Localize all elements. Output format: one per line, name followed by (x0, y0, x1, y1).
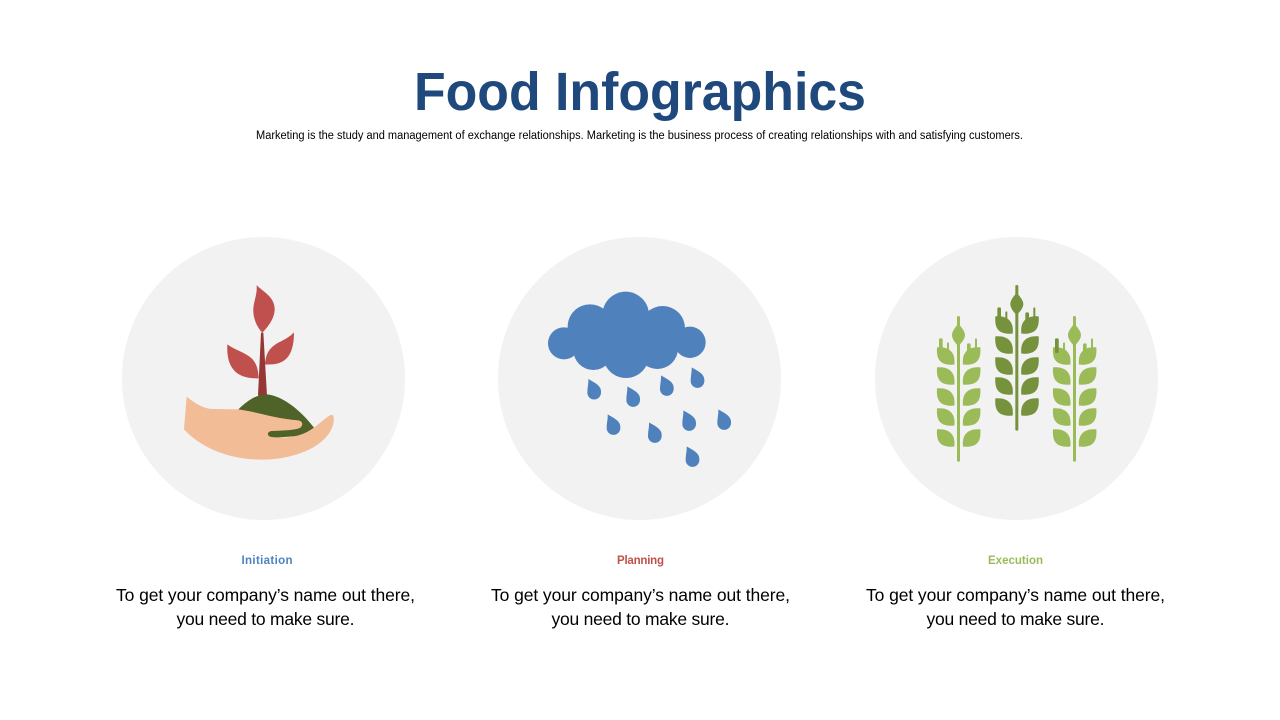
description: planning: you need to make sure. (552, 609, 730, 629)
title: Food Infographics (414, 62, 866, 122)
panel: execution (866, 237, 1165, 629)
description: execution: To get your company’s name out there, (866, 585, 1165, 605)
description: initiation (116, 585, 415, 629)
panel: planning (491, 237, 790, 629)
description: execution (866, 585, 1165, 629)
label: execution: Execution (988, 555, 1043, 567)
circle background: planning (498, 237, 781, 520)
description: initiation: To get your company’s name out there, (116, 585, 415, 605)
label: planning: Planning (617, 555, 664, 567)
description: execution: you need to make sure. (926, 609, 1104, 629)
circle background: execution (875, 237, 1158, 520)
description: planning (491, 585, 790, 629)
subtitle: Marketing is the study and management of exchange relationships. Marketing is the business process of creating relationships with and satisfying customers. (256, 130, 1023, 142)
icon: rain cloud (548, 292, 731, 467)
circle background: initiation (122, 237, 405, 520)
label: initiation: Initiation (242, 555, 292, 567)
description: planning: To get your company’s name out there, (491, 585, 790, 605)
panel: initiation (116, 237, 415, 629)
icon: seedling in hand (184, 285, 334, 460)
description: initiation: you need to make sure. (176, 609, 354, 629)
icon: wheat stalks (937, 285, 1096, 462)
